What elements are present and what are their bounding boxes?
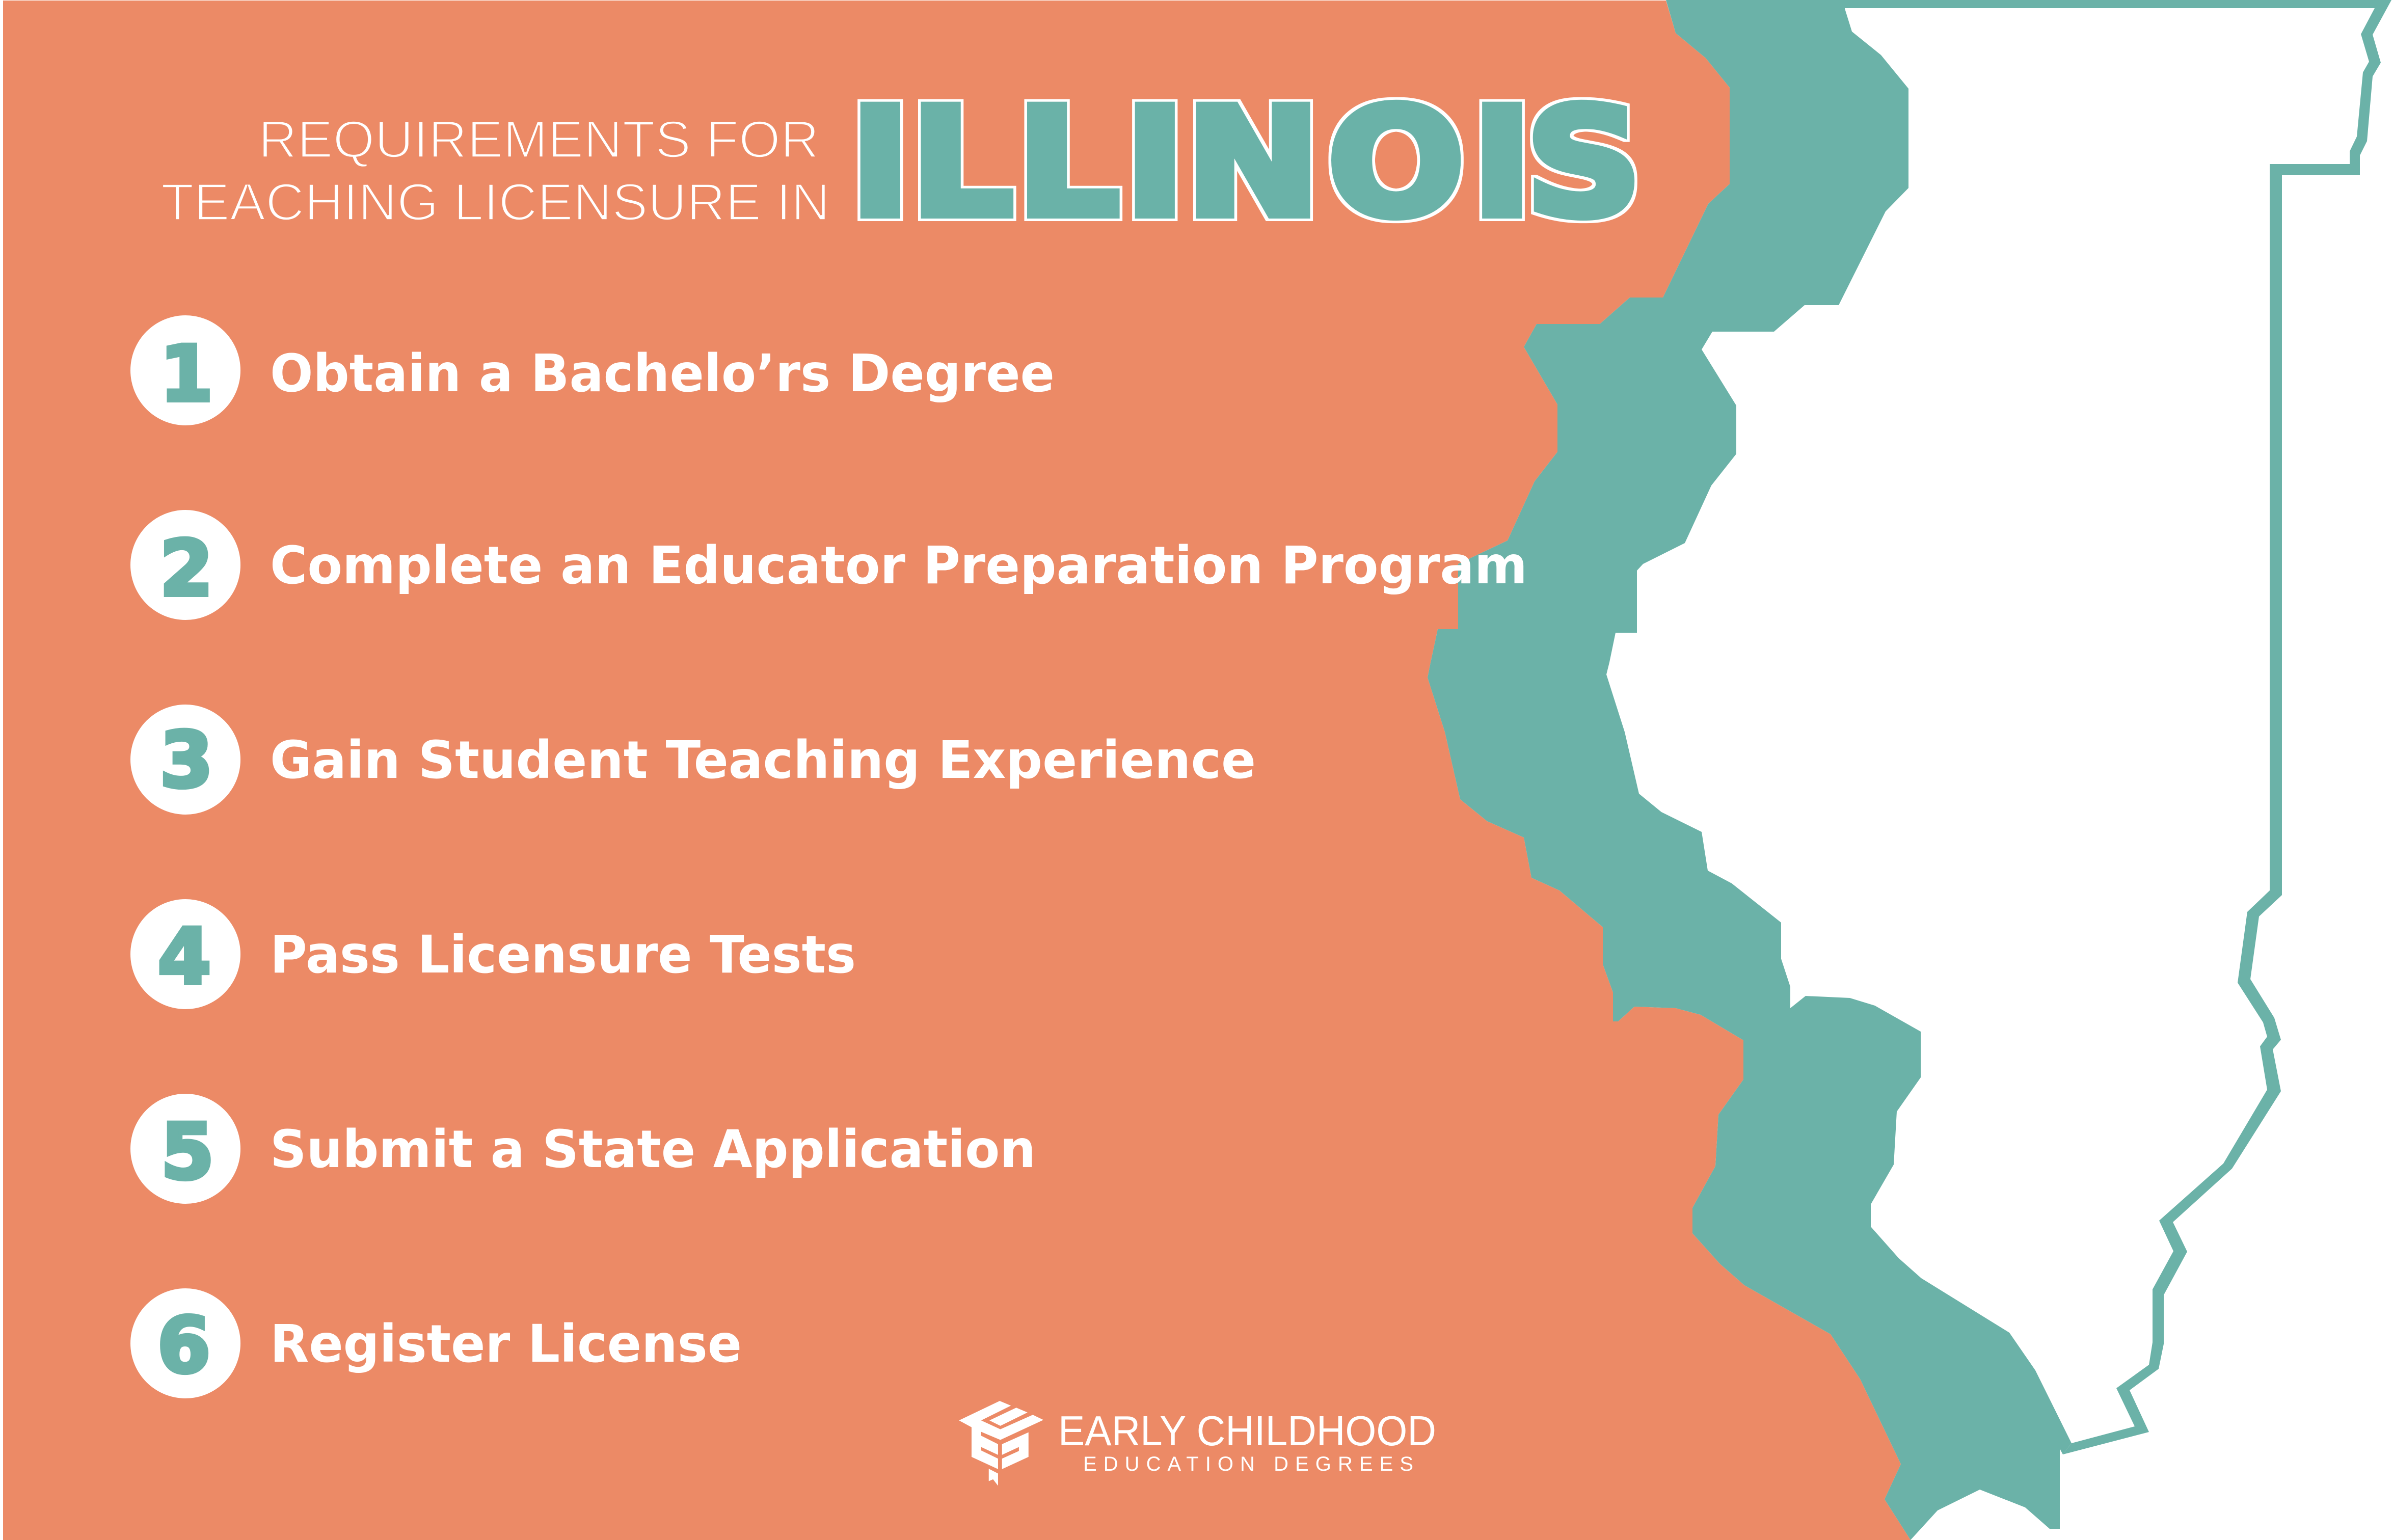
- title line 2: TEACHING LICENSURE IN: [161, 173, 830, 231]
- step 1: [130, 315, 1055, 425]
- number 4: 4: [158, 913, 211, 1002]
- number 6: 6: [157, 1302, 210, 1390]
- number 1: 1: [160, 330, 213, 419]
- step 5 label: Submit a State Application: [270, 1119, 1036, 1180]
- number 3: 3: [160, 716, 213, 805]
- step 2 label: Complete an Educator Preparation Program: [270, 535, 1527, 596]
- number 5: 5: [161, 1108, 214, 1197]
- step list: [130, 315, 1527, 1398]
- step 6 label: Register License: [270, 1314, 742, 1374]
- number badge 4: [130, 899, 240, 1009]
- number badge 6: [130, 1288, 240, 1398]
- logo: Early Childhood Education Degrees: [959, 1401, 1436, 1485]
- step 3 label: Gain Student Teaching Experience: [270, 730, 1256, 791]
- step 2: [130, 510, 1527, 620]
- step 5: [130, 1094, 1036, 1204]
- logo wordmark line 2: EDUCATION DEGREES: [1083, 1453, 1413, 1475]
- title: [161, 77, 1642, 249]
- step 3: [130, 705, 1256, 815]
- logo wordmark line 1: EARLY CHILDHOOD: [1058, 1407, 1436, 1454]
- number badge 5: [130, 1094, 240, 1204]
- state name ILLINOIS: ILLINOIS: [851, 77, 1642, 249]
- step 4: [130, 899, 856, 1009]
- step 1 label: Obtain a Bachelo’rs Degree: [270, 343, 1055, 404]
- number badge 1: [130, 315, 240, 425]
- number badge 2: [130, 510, 240, 620]
- number 2: 2: [160, 525, 213, 613]
- step 6: [130, 1288, 742, 1398]
- title line 1: REQUIREMENTS FOR: [258, 110, 819, 169]
- number badge 3: [130, 705, 240, 815]
- icon: graduation cap and book: [959, 1401, 1043, 1485]
- coral background panel: [3, 1, 1911, 1540]
- Illinois state outline: [1834, 0, 2391, 1454]
- teal band along the Illinois western border: [1428, 0, 2072, 1540]
- step 4 label: Pass Licensure Tests: [270, 925, 856, 985]
